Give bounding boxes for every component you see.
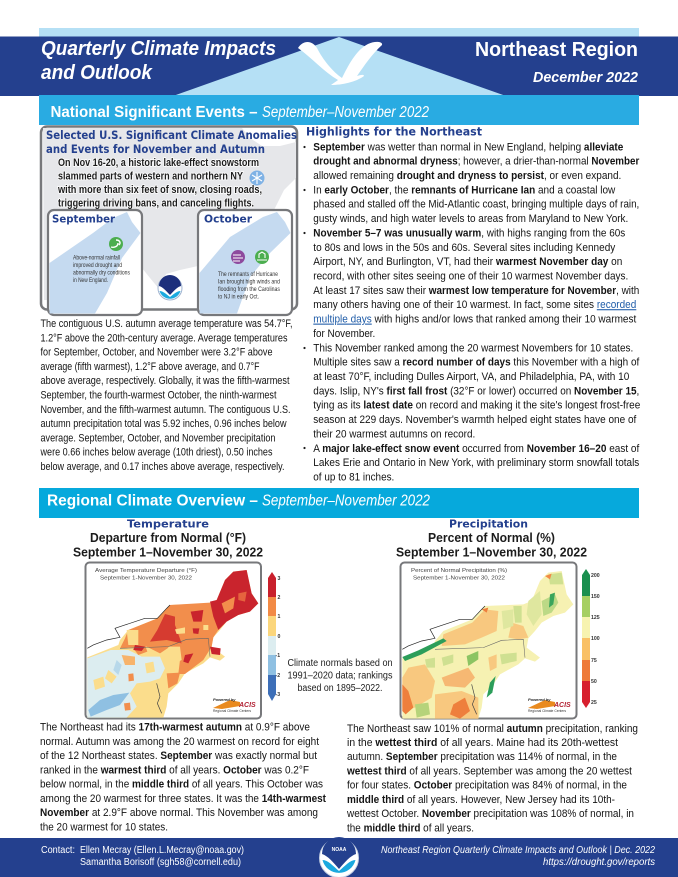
text block: highlights list: A major lake-effect snow event occurred from November 16–20 east of	[313, 443, 640, 455]
chart title: Percent of Normal Precipitation (%)	[411, 568, 507, 574]
text block: highlights list: at least 70°F, including Dulles Airport, VA, and Philadelphia, PA, with 10	[313, 371, 629, 383]
text block: highlights list: season at 229 days. November's warmth helped eight states have one of	[313, 414, 637, 426]
text block: highlights list: of up to 81 inches.	[313, 472, 394, 484]
text block: highlights list: In early October, the remnants of Hurricane Ian and a coastal low	[313, 184, 615, 196]
legend: precipitation colour bar: 50	[591, 679, 597, 685]
text block: national summary: were 0.66 inches below average (10th driest), 0.50 inches	[40, 447, 273, 459]
chart title	[95, 568, 197, 582]
text block: temperature summary: of the 12 Northeast states. September was exactly normal but	[40, 750, 317, 762]
text: October note: flooding from the Carolinas	[218, 287, 280, 293]
title: Quarterly Climate Impacts	[41, 38, 276, 60]
legend: precipitation colour bar	[582, 569, 600, 708]
chart: precipitation percent map	[400, 562, 576, 719]
map: September inset	[50, 212, 140, 314]
report reference	[381, 845, 655, 868]
text block: highlights list: gusty winds, and high water levels to areas from Maryland to New York.	[313, 213, 628, 225]
text: September note: abnormally dry conditions	[73, 270, 130, 276]
text block: national summary: autumn precipitation total was 5.92 inches, 0.96 inches below	[40, 418, 287, 430]
heading: October: October	[204, 214, 253, 226]
text block: national summary	[40, 318, 292, 473]
map: precipitation shading	[402, 571, 573, 719]
text block: precipitation summary: wettest October. November precipitation was 108% of normal, in	[346, 808, 634, 820]
chart: temperature departure map	[86, 562, 261, 718]
text block: temperature summary: The Northeast had its 17th-warmest autumn at 0.9°F above	[40, 722, 310, 734]
text block: highlights list: Lakes Erie and Ontario in New York, with preliminary storm snowfall totals	[313, 457, 640, 469]
contact details: Samantha Borisoff (sgh58@cornell.edu)	[80, 857, 241, 868]
text block: precipitation summary: the middle third of all years.	[347, 822, 474, 834]
legend: temperature colour bar: -1	[276, 653, 280, 659]
icon: NOAA logo: NOAA	[332, 847, 347, 853]
legend: precipitation colour bar: 150	[591, 594, 600, 600]
text block: national summary: below average, and 0.17 inches above average, respectively.	[40, 461, 284, 473]
text block: national summary: average (fifth warmest), 1.2°F above average, and 0.7°F	[40, 361, 260, 373]
legend: precipitation colour bar: 75	[591, 658, 597, 664]
legend: temperature colour bar: 0	[278, 634, 280, 640]
note: climate normals	[288, 658, 392, 694]
heading: temperature: Temperature	[127, 518, 209, 531]
logo: ACIS: Powered by	[528, 697, 551, 702]
text block: temperature summary: among the 20 warmest for three states. It was the 14th-warmest	[40, 793, 326, 805]
text block: highlights list: days. Islip, NY's first fall frost (32°F or lower) occurred on November 15,	[313, 385, 639, 397]
report reference: https://drought.gov/reports	[543, 857, 655, 868]
text block: precipitation summary	[346, 723, 638, 834]
text: October note	[218, 272, 280, 300]
legend: temperature colour bar: -2	[276, 673, 280, 679]
bullets	[303, 146, 306, 449]
inset: September	[48, 210, 142, 315]
text block: highlights list: phased and stalled off the Mid-Atlantic coast, bringing multiple days of rain,	[313, 199, 639, 211]
callout: lake-effect snowstorm: with more than six feet of snow, closing roads,	[57, 184, 262, 196]
chart title	[411, 568, 507, 582]
heading: September: September	[52, 214, 116, 226]
logo: ACIS: ACIS	[553, 702, 571, 709]
map: October inset	[200, 212, 290, 314]
text block: precipitation summary: autumn. September precipitation was 114% of normal, in the	[347, 751, 617, 763]
section heading: regional climate overview: September–November 2022	[262, 493, 430, 510]
text block: temperature summary: November at 2.9°F above normal. This November was among	[40, 807, 318, 819]
panel title: and Events for November and Autumn	[46, 142, 265, 156]
text block: highlights list: record, with other sites seeing one of their 10 warmest November days.	[313, 270, 628, 282]
legend: precipitation colour bar: 25	[591, 700, 597, 706]
icon: flood	[255, 250, 269, 264]
heading: precipitation: September 1–November 30, 2022	[396, 546, 587, 560]
text block: highlights list: September was wetter than normal in New England, helping alleviate	[313, 141, 623, 153]
legend: temperature colour bar	[268, 572, 280, 701]
icon: snowflake	[250, 170, 264, 186]
title: and Outlook	[41, 62, 153, 84]
inset: October	[198, 210, 292, 315]
chart title: Average Temperature Departure (°F)	[95, 568, 197, 574]
panel title: Selected U.S. Significant Climate Anomalies	[46, 128, 297, 142]
chart title: September 1-November 30, 2022	[100, 576, 192, 582]
heading: temperature: September 1–November 30, 2022	[73, 546, 263, 560]
section heading: regional climate overview: Regional Climate Overview –	[47, 493, 258, 510]
logo: ACIS: ACIS	[238, 702, 256, 709]
section heading: national significant events: National Significant Events –	[50, 104, 258, 121]
heading: precipitation: Precipitation	[449, 518, 528, 531]
icon: green drought circle	[109, 237, 123, 251]
heading: highlights for the Northeast: Highlights for the Northeast	[306, 124, 482, 138]
text block: highlights list: At least 17 sites saw their warmest low temperature for November, with	[313, 285, 639, 297]
logo: ACIS: Regional Climate Centers	[213, 709, 251, 713]
map: US land background	[43, 128, 296, 300]
text block: national summary: average. September, October, and November precipitation	[40, 432, 276, 444]
icon: NOAA logo	[158, 275, 182, 300]
heading: temperature: Departure from Normal (°F)	[90, 531, 246, 545]
contact details: Contact:	[41, 845, 75, 856]
text block: highlights list: to 80s and lows in the 50s and 60s. Several sites including Kennedy	[313, 242, 616, 254]
logo: ACIS	[528, 697, 571, 713]
callout: lake-effect snowstorm: On Nov 16-20, a historic lake-effect snowstorm	[58, 157, 259, 169]
text block: highlights list: many others having one of their 10 warmest. In fact, some sites recorded	[313, 299, 636, 311]
panel: national anomalies map	[41, 126, 297, 315]
icon: wind	[231, 250, 245, 264]
note: climate normals: based on 1895–2022.	[298, 683, 382, 694]
heading: precipitation	[396, 518, 587, 560]
region and date	[475, 39, 638, 86]
text block: national summary: above average, respectively. Globally, it was the fifth-warmest	[40, 375, 290, 387]
legend: temperature colour bar: 2	[278, 595, 280, 601]
logo: ACIS: Powered by	[213, 697, 236, 702]
heading: precipitation: Percent of Normal (%)	[428, 531, 555, 545]
text block: highlights list: Multiple sites saw a record number of days this November with a high of	[313, 357, 640, 369]
chart title: September 1-November 30, 2022	[413, 576, 505, 582]
legend: precipitation colour bar: 100	[591, 636, 600, 642]
text block: national summary: September, the fourth-warmest October, the ninth-warmest	[40, 390, 276, 402]
text block: national summary: for September, October, and November were 3.2°F above	[40, 347, 272, 359]
text block: highlights list: multiple days with highs and/or lows that ranked among their 10 warmest	[313, 314, 636, 326]
note: climate normals: 1991–2020 data; rankings	[288, 670, 392, 682]
section heading: national significant events	[39, 95, 639, 125]
map: temperature shading	[87, 570, 258, 718]
text: October note: Ian brought high winds and	[218, 280, 280, 286]
callout: lake-effect snowstorm: triggering driving bans, and canceling flights.	[58, 198, 254, 210]
text block: precipitation summary: wettest third of all years. September was among the 20 wettest	[346, 765, 632, 777]
section heading: national significant events: September–November 2022	[262, 104, 429, 121]
text block: temperature summary: the 20 warmest for 10 states.	[40, 822, 168, 834]
text: September note: in New England.	[73, 278, 108, 284]
footer	[0, 837, 678, 877]
note: climate normals: Climate normals based on	[288, 658, 392, 669]
text block: precipitation summary: middle third of all years. However, New Jersey had its 10th-	[347, 794, 615, 806]
panel title	[46, 128, 297, 156]
text block: precipitation summary: in the wettest third of all years. Maine had its 20th-wettest	[347, 737, 618, 749]
legend: temperature colour bar: 1	[278, 614, 280, 620]
logo: ACIS	[213, 697, 256, 713]
contact details	[41, 845, 244, 868]
logo: ACIS: Regional Climate Centers	[528, 709, 566, 713]
callout: lake-effect snowstorm	[57, 157, 262, 210]
text block: temperature summary: below normal, in the middle third of all years. This October was	[40, 779, 324, 791]
region and date: Northeast Region	[475, 39, 638, 61]
text: September note	[73, 256, 130, 284]
text block: highlights list: November 5–7 was unusually warm, with highs ranging from the 60s	[313, 228, 626, 240]
region and date: December 2022	[533, 70, 638, 86]
legend: precipitation colour bar: 200	[591, 573, 600, 579]
text block: precipitation summary: for four states. October precipitation was 84% of normal, in the	[347, 780, 627, 792]
text block: highlights list: This November ranked among the 20 warmest Novembers for 10 states.	[313, 342, 633, 354]
text block: highlights list: Airport, NY, and Burlington, VT, had their warmest November day on	[313, 256, 622, 268]
text: October note: The remnants of Hurricane	[218, 272, 279, 278]
text block: temperature summary: normal. Autumn was among the 20 warmest on record for eight	[40, 736, 319, 748]
section heading: regional climate overview	[39, 488, 639, 518]
legend: temperature colour bar: 3	[278, 576, 280, 582]
legend: precipitation colour bar: 125	[591, 615, 600, 621]
text block: highlights list	[303, 141, 640, 484]
callout: lake-effect snowstorm: slammed parts of western and northern NY	[58, 170, 244, 182]
text block: temperature summary	[40, 722, 326, 834]
text block: temperature summary: ranked in the warmest third of all years. October was 0.2°F	[40, 764, 309, 776]
text block: highlights list: allowed remaining drought and dryness to persist, or even expand.	[313, 170, 621, 182]
text block: national summary: 1.2°F above the 20th-century average. Average temperatures	[40, 332, 288, 344]
text block: precipitation summary: The Northeast saw 101% of normal autumn precipitation, ranking	[347, 723, 638, 735]
text block: highlights list: their 20 warmest autumns on record.	[313, 428, 475, 440]
icon: white bird	[298, 42, 382, 85]
text: October note: to NJ in early Oct.	[218, 294, 259, 300]
text: September note: Above-normal rainfall	[73, 256, 120, 262]
icon: NOAA logo	[320, 837, 358, 877]
title	[41, 38, 276, 84]
heading: temperature	[73, 518, 263, 560]
legend: temperature colour bar: -3	[276, 692, 280, 698]
text block: national summary: November, and the fifth-warmest autumn. The contiguous U.S.	[40, 404, 290, 416]
contact details: Ellen Mecray (Ellen.L.Mecray@noaa.gov)	[80, 845, 244, 856]
text block: highlights list: for November.	[313, 328, 375, 340]
text block: highlights list: drought and abnormal dryness; however, a drier-than-normal November	[313, 156, 640, 168]
text block: highlights list: tying as its latest date on record and making it the site's longest frost-free	[313, 400, 640, 412]
text block: national summary: The contiguous U.S. autumn average temperature was 54.7°F,	[40, 318, 292, 330]
text: September note: improved drought and	[73, 263, 122, 269]
header banner	[0, 28, 678, 96]
